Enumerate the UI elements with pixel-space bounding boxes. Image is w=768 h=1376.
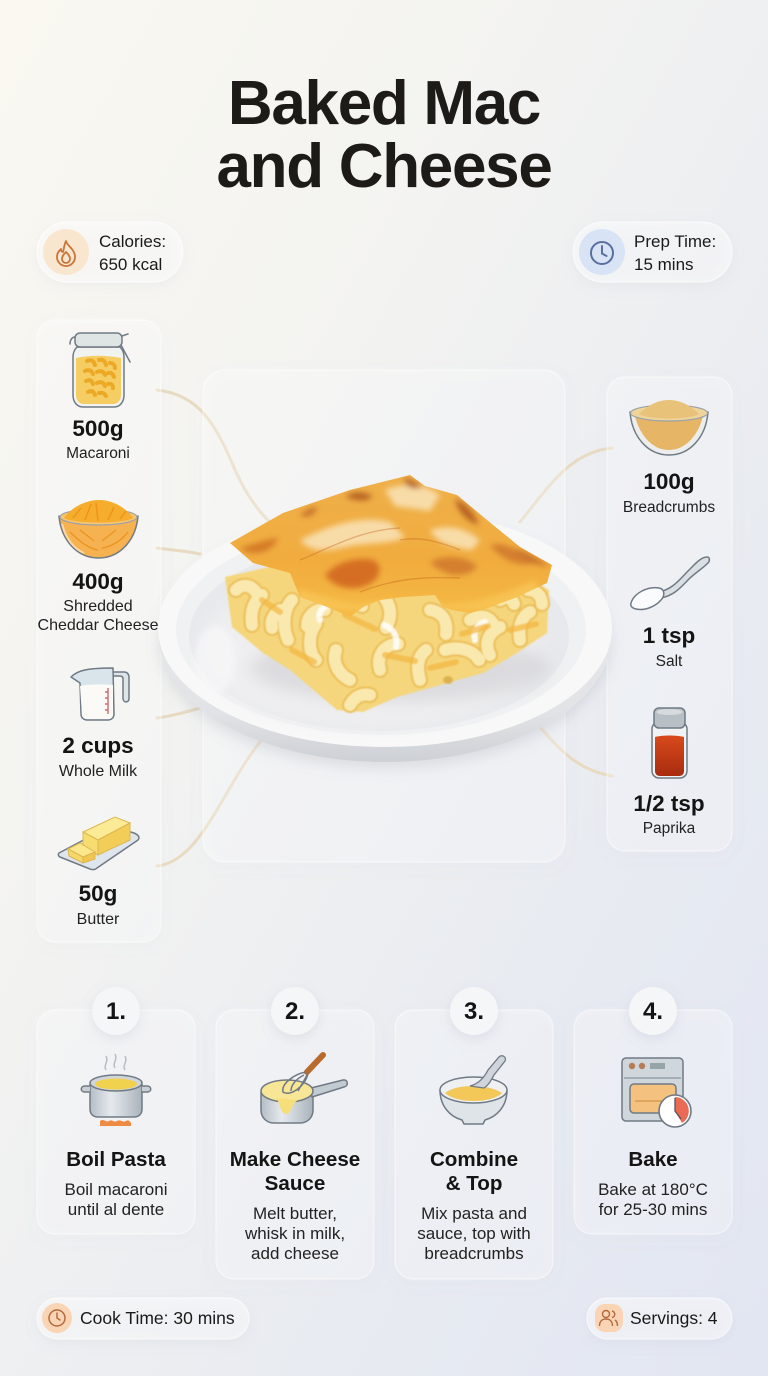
step 3: combine and top: Mix pasta and — [421, 1204, 527, 1223]
panel: left ingredients: 50g — [79, 881, 117, 906]
panel: right ingredients: 1/2 tsp — [633, 791, 705, 816]
title: and Cheese — [216, 132, 552, 201]
number badge — [271, 987, 319, 1035]
step 4: bake — [574, 987, 732, 1234]
panel: right ingredients: Salt — [656, 653, 683, 670]
step 2: make cheese sauce: Make Cheese — [230, 1148, 360, 1171]
step 1: boil pasta: until al dente — [68, 1200, 164, 1219]
icon: people — [600, 1310, 618, 1326]
step 3: combine and top — [395, 987, 553, 1279]
step 1: boil pasta: Boil macaroni — [64, 1180, 168, 1199]
panel: left ingredients: 400g — [72, 569, 124, 594]
step 3: combine and top: sauce, top with — [417, 1224, 531, 1243]
icon: cheddar bowl — [59, 500, 138, 558]
hero: plate of baked mac and cheese — [158, 470, 612, 762]
step 2: make cheese sauce: whisk in milk, — [244, 1224, 345, 1243]
icon: oven with timer — [622, 1058, 691, 1127]
panel: left ingredients: Whole Milk — [59, 763, 138, 780]
icon: boiling pot — [81, 1054, 151, 1126]
step 4: bake: Bake — [628, 1148, 678, 1171]
panel: left ingredients: Cheddar Cheese — [38, 617, 159, 634]
icon: salt spoon — [631, 557, 709, 610]
stat pill: calories: 650 kcal — [99, 255, 162, 274]
number badge — [92, 987, 140, 1035]
icon: butter on dish — [58, 817, 139, 870]
panel: right ingredients: 100g — [643, 469, 695, 494]
macaroni slab — [225, 560, 549, 712]
connector lines — [157, 390, 612, 866]
title — [216, 69, 552, 201]
icon: mixing bowl and spoon — [440, 1056, 507, 1124]
stat pill: calories: Calories: — [99, 232, 166, 251]
plate — [158, 509, 612, 762]
number badge: 4. — [643, 998, 663, 1025]
step 1: boil pasta — [37, 987, 195, 1234]
icon: saucepan and whisk — [261, 1055, 347, 1123]
number badge — [629, 987, 677, 1035]
icon: clock — [49, 1310, 65, 1326]
panel: left ingredients: 500g — [72, 416, 124, 441]
stat pill: prep time: 15 mins — [634, 255, 694, 274]
panel: left ingredients: Shredded — [63, 598, 133, 615]
panel: right ingredients — [607, 377, 732, 851]
panel: left ingredients: Macaroni — [66, 445, 130, 462]
title: Baked Mac — [228, 69, 540, 138]
icon: macaroni jar — [70, 333, 130, 407]
icon: measuring cup — [71, 668, 129, 720]
panel: right ingredients: Breadcrumbs — [623, 499, 715, 516]
stat pill: servings: Servings: 4 — [630, 1308, 718, 1328]
icon: flame — [57, 241, 75, 266]
panel: left ingredients: 2 cups — [62, 733, 134, 758]
stat pill: calories — [37, 222, 183, 282]
icon: paprika shaker — [652, 708, 687, 778]
step 3: combine and top: breadcrumbs — [424, 1244, 524, 1263]
step 4: bake: Bake at 180°C — [598, 1180, 708, 1199]
panel: hero backdrop — [203, 370, 565, 862]
step 2: make cheese sauce: Sauce — [265, 1172, 325, 1195]
step 3: combine and top: & Top — [446, 1172, 502, 1195]
step 3: combine and top: Combine — [430, 1148, 518, 1171]
panel: right ingredients: 1 tsp — [643, 623, 695, 648]
step 1: boil pasta: Boil Pasta — [66, 1148, 166, 1171]
number badge — [450, 987, 498, 1035]
number badge: 3. — [464, 998, 484, 1025]
cheese crust — [230, 475, 552, 617]
panel: left ingredients: Butter — [77, 911, 120, 928]
number badge: 2. — [285, 998, 305, 1025]
stat pill: cook time: Cook Time: 30 mins — [80, 1308, 235, 1328]
number badge: 1. — [106, 998, 126, 1025]
panel: left ingredients — [37, 320, 161, 942]
macaroni pieces — [236, 586, 542, 705]
icon: breadcrumb bowl — [630, 400, 708, 455]
step 2: make cheese sauce — [216, 987, 374, 1279]
stat pill: cook time — [37, 1298, 249, 1339]
panel: right ingredients: Paprika — [643, 820, 696, 837]
step 2: make cheese sauce: add cheese — [251, 1244, 339, 1263]
stat pill: prep time: Prep Time: — [634, 232, 716, 251]
stat pill: servings — [587, 1298, 732, 1339]
step 2: make cheese sauce: Melt butter, — [253, 1204, 337, 1223]
stat pill: prep time — [573, 222, 732, 282]
icon: clock — [591, 242, 613, 264]
step 4: bake: for 25-30 mins — [599, 1200, 707, 1219]
